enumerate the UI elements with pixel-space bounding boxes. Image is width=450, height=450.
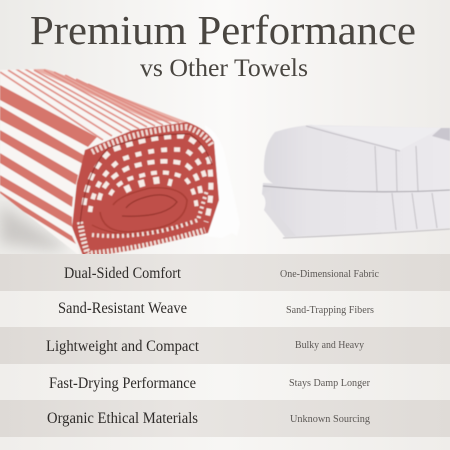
top edge tint xyxy=(30,68,190,123)
outer top stripes xyxy=(92,127,212,152)
left column: premium features xyxy=(46,265,200,427)
fold flap xyxy=(308,124,441,150)
ring five xyxy=(125,180,172,190)
title: Premium Performance xyxy=(30,7,416,53)
drawback 1: One-Dimensional Fabric xyxy=(280,268,379,280)
row 3 band xyxy=(0,327,450,364)
row 6 band xyxy=(0,437,450,450)
image: folded white towels xyxy=(262,124,450,238)
image: rolled striped towel xyxy=(0,68,220,254)
fringe xyxy=(205,125,240,238)
roll end face xyxy=(70,120,222,260)
feature 2: Sand-Resistant Weave xyxy=(58,300,187,317)
ring two xyxy=(90,149,205,212)
core spiral xyxy=(100,188,187,232)
feature 3: Lightweight and Compact xyxy=(46,338,200,355)
ring four xyxy=(110,172,197,212)
towel bands xyxy=(375,146,437,230)
row 1 band xyxy=(0,254,450,291)
ring three xyxy=(99,161,201,200)
lower stripes xyxy=(92,190,207,236)
bottom shadow xyxy=(283,229,450,238)
ring one xyxy=(84,136,211,222)
thick stripes xyxy=(0,85,97,244)
subtitle: vs Other Towels xyxy=(140,55,308,82)
flap shadow xyxy=(306,126,400,151)
drawback 2: Sand-Trapping Fibers xyxy=(286,304,374,316)
flap inner shade xyxy=(432,128,450,141)
drawback 4: Stays Damp Longer xyxy=(289,377,370,389)
row 4 band xyxy=(0,364,450,400)
row 5 band xyxy=(0,400,450,437)
towel divider xyxy=(263,186,450,192)
drawback 3: Bulky and Heavy xyxy=(295,339,364,351)
feature 4: Fast-Drying Performance xyxy=(49,375,196,392)
feature 5: Organic Ethical Materials xyxy=(47,410,198,427)
drawback 5: Unknown Sourcing xyxy=(290,413,370,425)
roll body xyxy=(0,68,188,251)
roll shadow xyxy=(0,205,70,250)
bottom towel xyxy=(262,183,450,237)
feature 1: Dual-Sided Comfort xyxy=(64,265,182,282)
outer bottom stripes xyxy=(80,222,205,254)
table rows xyxy=(0,254,450,450)
top towel xyxy=(264,125,450,191)
bottom towel folded edge xyxy=(262,190,296,237)
thin stripes xyxy=(0,69,179,140)
separator one xyxy=(80,134,212,225)
row 2 band xyxy=(0,291,450,327)
right column: other towels xyxy=(280,268,379,425)
